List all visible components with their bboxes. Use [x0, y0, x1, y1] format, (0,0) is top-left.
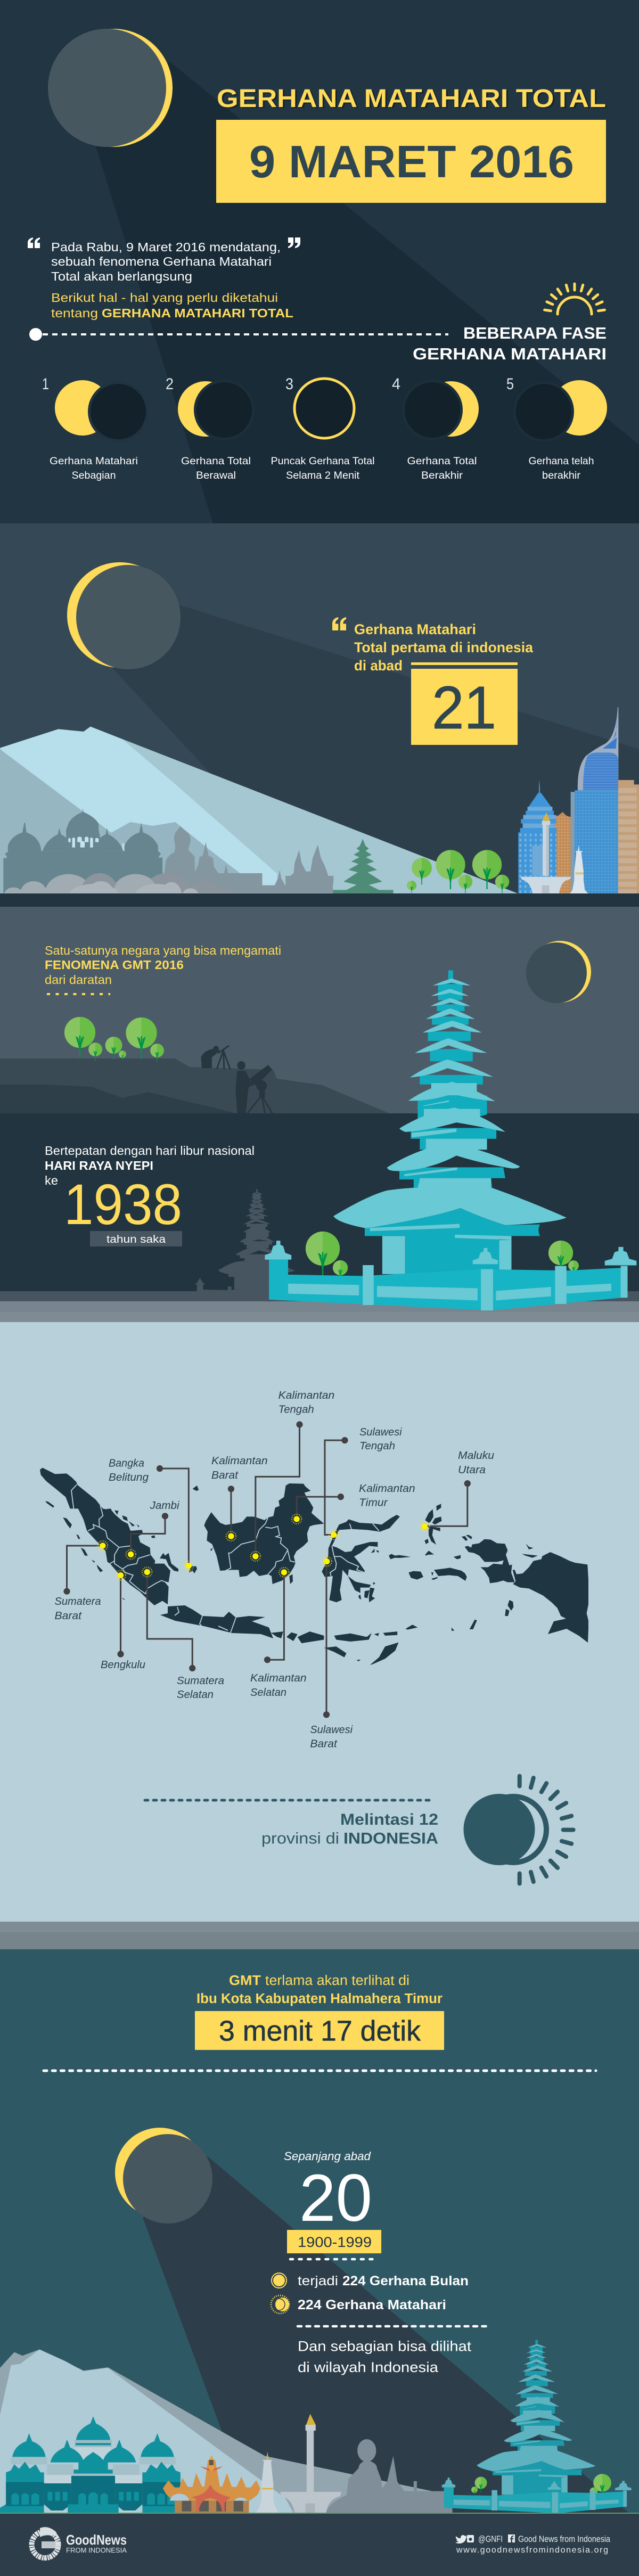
phase 2: Gerhana Total: [181, 455, 251, 467]
dashed timeline: [29, 328, 448, 341]
province pointers: [67, 1424, 468, 1714]
quote: first total eclipse: Gerhana Matahari: [354, 621, 476, 637]
province labels: Sulawesi: [359, 1426, 402, 1438]
province labels: Tengah: [359, 1440, 395, 1452]
label: along the century: Sepanjang abad: [284, 2150, 371, 2163]
province labels: Jambi: [150, 1500, 179, 1512]
city skyline silhouettes: [0, 808, 334, 914]
province labels: Sumatera: [54, 1596, 101, 1607]
province labels: Barat: [211, 1470, 239, 1481]
phase 5: berakhir: [542, 470, 581, 481]
city towers: [518, 707, 639, 893]
province labels: [54, 1390, 494, 1750]
logo: GoodNews from Indonesia: [32, 2527, 127, 2558]
phase 1: Gerhana Matahari: [50, 455, 138, 467]
statement: longest GMT: [196, 1973, 443, 2006]
date banner: [216, 120, 606, 203]
province labels: Belitung: [109, 1472, 149, 1483]
monuments: [256, 2414, 341, 2513]
callout: century 21: [411, 662, 518, 745]
label: tahun saka: tahun saka: [106, 1234, 166, 1245]
title: GERHANA MATAHARI TOTAL: [217, 85, 606, 113]
temple small: [442, 2340, 632, 2513]
phase 1: Sebagian: [71, 470, 116, 481]
province labels: Bengkulu: [101, 1659, 145, 1671]
quote: first total eclipse: [332, 617, 534, 674]
callout: duration: [195, 2011, 444, 2050]
statement: observation: Satu-satunya negara yang bisa mengamati: [45, 944, 281, 957]
icon: eclipse moon: [67, 562, 181, 669]
trees by temple: [306, 1232, 579, 1280]
phase 5: Gerhana telah: [528, 455, 594, 467]
logo: GoodNews from Indonesia: FROM INDONESIA: [66, 2546, 127, 2554]
phase 4: [392, 375, 479, 481]
heading: phases: [413, 324, 607, 363]
statement: observation: [45, 944, 281, 994]
province labels: Barat: [54, 1610, 83, 1622]
quote: first total eclipse: di abad: [354, 658, 403, 674]
statement: observation: FENOMENA GMT 2016: [45, 958, 184, 972]
province labels: Maluku: [458, 1450, 494, 1462]
stat: lunar eclipses: [272, 2273, 469, 2288]
statement: 12 provinces: INDONESIA: [343, 1830, 438, 1848]
stat: lunar eclipses: terjadi: [298, 2274, 338, 2288]
temple silhouettes: [326, 2439, 452, 2513]
statement: longest GMT: Ibu Kota Kabupaten Halmahera Timur: [196, 1991, 443, 2006]
panel: map of provinces: [0, 1322, 639, 1949]
trees on hill: [64, 1017, 164, 1062]
statement: Nyepi: HARI RAYA NYEPI: [45, 1159, 153, 1172]
trees: [407, 850, 509, 893]
label: tahun saka: [90, 1231, 182, 1246]
province labels: Tengah: [278, 1404, 314, 1415]
phase 2: [166, 375, 255, 481]
quote intro: Total akan berlangsung: [51, 269, 192, 283]
icon: eclipse with rays: [463, 1776, 574, 1884]
province labels: Timur: [359, 1497, 388, 1509]
phase 5: [506, 375, 607, 481]
province labels: Sulawesi: [310, 1724, 353, 1736]
phase 3: 3: [285, 375, 293, 393]
trees: [471, 2474, 611, 2498]
number: 1938: 1938: [64, 1172, 182, 1236]
mountain: [0, 2350, 432, 2513]
phase 3: Selama 2 Menit: [286, 470, 360, 481]
traditional house: [163, 2455, 260, 2513]
statement: 12 provinces: Melintasi 12: [340, 1811, 438, 1828]
heading: phases: BEBERAPA FASE: [463, 324, 607, 342]
temple Ulun Danu: [265, 970, 636, 1310]
province labels: Selatan: [250, 1687, 286, 1699]
stat: lunar eclipses: 224 Gerhana Bulan: [342, 2274, 469, 2288]
social links: www.goodnewsfromindonesia.org: [456, 2546, 608, 2555]
phase 4: Gerhana Total: [407, 455, 477, 467]
quote intro: sebuah fenomena Gerhana Matahari: [51, 255, 272, 268]
phase 4: Berakhir: [421, 470, 463, 481]
heading: phases: GERHANA MATAHARI: [413, 344, 607, 363]
statement: visible in Indonesia: [298, 2339, 472, 2375]
highlighted intro: tentang: [51, 306, 98, 320]
statement: 12 provinces: provinsi di: [261, 1830, 339, 1848]
province labels: Kalimantan: [250, 1672, 307, 1684]
logo: GoodNews from Indonesia: GoodNews: [66, 2532, 127, 2548]
map of Indonesia: [40, 1468, 588, 1665]
social links: @GNFI: [478, 2534, 503, 2544]
statement: Nyepi: ke: [45, 1174, 58, 1187]
mosque: [0, 2416, 186, 2513]
label: years: 1900-1999: [298, 2234, 372, 2250]
panel: header section: [0, 0, 639, 523]
quote intro: Pada Rabu, 9 Maret 2016 mendatang,: [51, 240, 281, 254]
social links: [455, 2534, 610, 2555]
icon: rising sun: [545, 284, 604, 314]
stargazers silhouettes: [201, 1046, 272, 1113]
phase 3: Puncak Gerhana Total: [271, 455, 375, 467]
province markers: [63, 1421, 471, 1718]
stat: solar eclipses: 224 Gerhana Matahari: [298, 2298, 446, 2312]
temple silhouette: [195, 1189, 318, 1301]
divider dots: [145, 1799, 432, 1802]
quote: first total eclipse: Total pertama di indonesia: [354, 639, 534, 655]
highlighted intro: Berikut hal - hal yang perlu diketahui: [51, 291, 278, 305]
statement: 12 provinces: [261, 1811, 438, 1848]
statement: visible in Indonesia: Dan sebagian bisa dilihat: [298, 2339, 472, 2355]
statement: Nyepi: Bertepatan dengan hari libur nasional: [45, 1144, 255, 1158]
province labels: Selatan: [177, 1689, 214, 1701]
province labels: Barat: [310, 1738, 338, 1750]
province labels: Utara: [458, 1464, 486, 1476]
phase 3: [271, 375, 375, 481]
quote intro: [28, 237, 300, 283]
icon: eclipse: [115, 2128, 212, 2224]
phase 2: Berawal: [196, 470, 236, 481]
highlighted intro: [51, 291, 293, 320]
statement: observation: dari daratan: [45, 973, 112, 987]
label: years: [287, 2230, 381, 2253]
province labels: Bangka: [109, 1458, 144, 1470]
province labels: Kalimantan: [278, 1390, 334, 1401]
panel: footer: [0, 2514, 639, 2576]
province labels: Sumatera: [177, 1675, 224, 1687]
statement: visible in Indonesia: di wilayah Indonesia: [298, 2359, 439, 2375]
number: 20: 20: [299, 2161, 372, 2235]
province labels: Kalimantan: [359, 1483, 415, 1495]
mountain: [0, 727, 518, 893]
statement: Nyepi: [45, 1144, 255, 1187]
phase 1: [42, 375, 149, 481]
callout: duration: 3 menit 17 detik: [219, 2015, 421, 2047]
date banner: 9 MARET 2016: [249, 137, 574, 187]
icon: green pagoda: [333, 839, 394, 893]
social links: Good News from Indonesia: [518, 2534, 610, 2544]
panel: only country observing from land: [0, 907, 639, 1322]
icon: eclipse moon small: [526, 941, 591, 1003]
panel: first total eclipse of the century: [0, 523, 639, 914]
callout: century 21: 21: [432, 674, 496, 741]
province labels: Kalimantan: [211, 1455, 268, 1467]
panel: longest eclipse and statistics: [0, 1949, 639, 2514]
hills: [0, 1059, 389, 1113]
phase 5: 5: [506, 375, 514, 393]
icon: hero eclipse: [48, 29, 173, 147]
phase 2: 2: [166, 375, 174, 393]
highlighted intro: GERHANA MATAHARI TOTAL: [102, 306, 293, 320]
stat: solar eclipses: [271, 2295, 446, 2314]
phase 1: 1: [42, 375, 49, 393]
statement: longest GMT: terlama akan terlihat di: [265, 1973, 409, 1988]
phase 4: 4: [392, 375, 400, 393]
statement: longest GMT: GMT: [229, 1973, 261, 1988]
